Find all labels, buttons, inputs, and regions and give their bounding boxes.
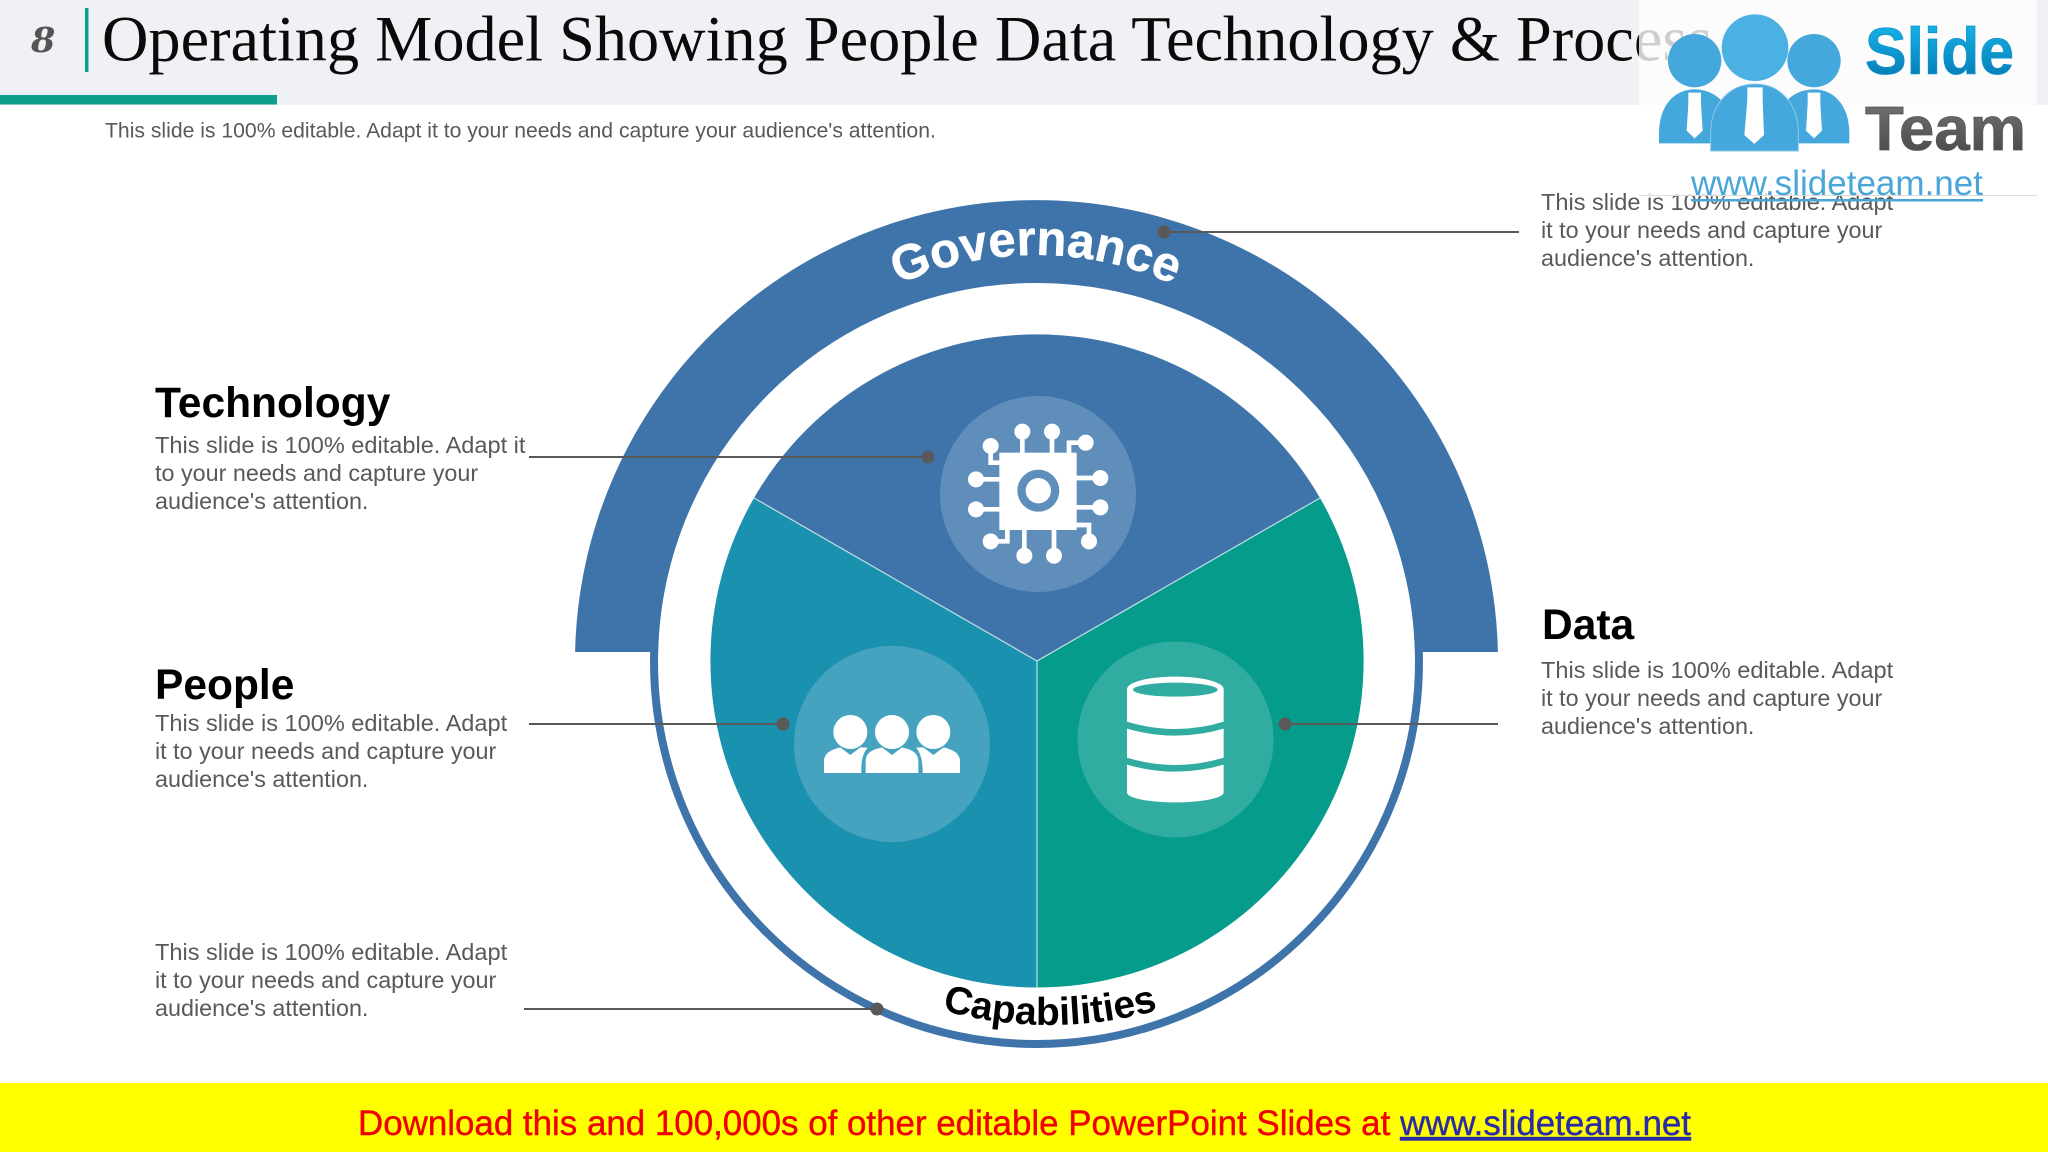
- logo: SlideTeam: www.slideteam.net: [1690, 164, 1983, 203]
- heading: people: People: [155, 662, 294, 709]
- text: technology description: This slide is 100% editable. Adapt it: [155, 432, 526, 458]
- icon: database: [1078, 642, 1274, 838]
- segment: technology: [754, 334, 1320, 661]
- text: people description: This slide is 100% editable. Adapt: [155, 710, 508, 736]
- callout: governance description: it to your needs and capture your: [1541, 217, 1883, 243]
- segment: people: [710, 498, 1037, 988]
- connector: governance: [1158, 226, 1519, 238]
- subtitle: This slide is 100% editable. Adapt it to your needs and capture your audience's attention.: [105, 120, 936, 142]
- pie chart: [710, 334, 1364, 988]
- governance arc: [575, 200, 1498, 652]
- text: data description: it to your needs and capture your: [1541, 685, 1883, 711]
- text: people description: it to your needs and capture your: [155, 738, 497, 764]
- text: data description: audience's attention.: [1541, 713, 1754, 739]
- footer text: Download this and 100,000s of other editable PowerPoint Slides at www.slideteam.net: [358, 1104, 1691, 1143]
- callout: governance description: This slide is 100% editable. Adapt: [1541, 189, 1894, 215]
- capabilities ring: [654, 279, 1419, 1044]
- callout: capabilities description: it to your needs and capture your: [155, 967, 497, 993]
- heading: technology: Technology: [155, 380, 391, 427]
- connector: data: [1278, 718, 1498, 730]
- title: Operating Model Showing People Data Technology & Process: [102, 4, 1712, 74]
- slide number: 8: [30, 20, 55, 61]
- text: data description: This slide is 100% editable. Adapt: [1541, 657, 1894, 683]
- callout: capabilities description: This slide is 100% editable. Adapt: [155, 939, 508, 965]
- title divider: [85, 8, 88, 72]
- icon: technology chip: [940, 396, 1136, 592]
- logo: SlideTeam: Slide: [1865, 14, 2014, 88]
- header bar: [0, 0, 2048, 105]
- text: technology description: to your needs and capture your: [155, 460, 478, 486]
- heading: data: Data: [1542, 602, 1634, 649]
- text: technology description: audience's attention.: [155, 488, 368, 514]
- governance label: Governance: [892, 228, 1178, 282]
- logo: SlideTeam: [1639, 0, 2037, 203]
- capabilities label: Capabilities: [946, 986, 1156, 1030]
- segment: data: [1037, 498, 1364, 988]
- connector: people: [529, 718, 790, 730]
- logo: SlideTeam: Team: [1865, 95, 2026, 164]
- footer banner: [0, 1083, 2048, 1152]
- callout: data: [1541, 602, 1894, 739]
- connector: capabilities: [524, 1002, 884, 1016]
- text: people description: audience's attention.: [155, 766, 368, 792]
- callout: technology: [155, 380, 526, 514]
- connector: technology: [529, 450, 934, 464]
- callout: people: [155, 662, 508, 792]
- icon: people: [794, 646, 990, 842]
- callout: governance description: audience's attention.: [1541, 245, 1754, 271]
- callout: capabilities description: audience's attention.: [155, 995, 368, 1021]
